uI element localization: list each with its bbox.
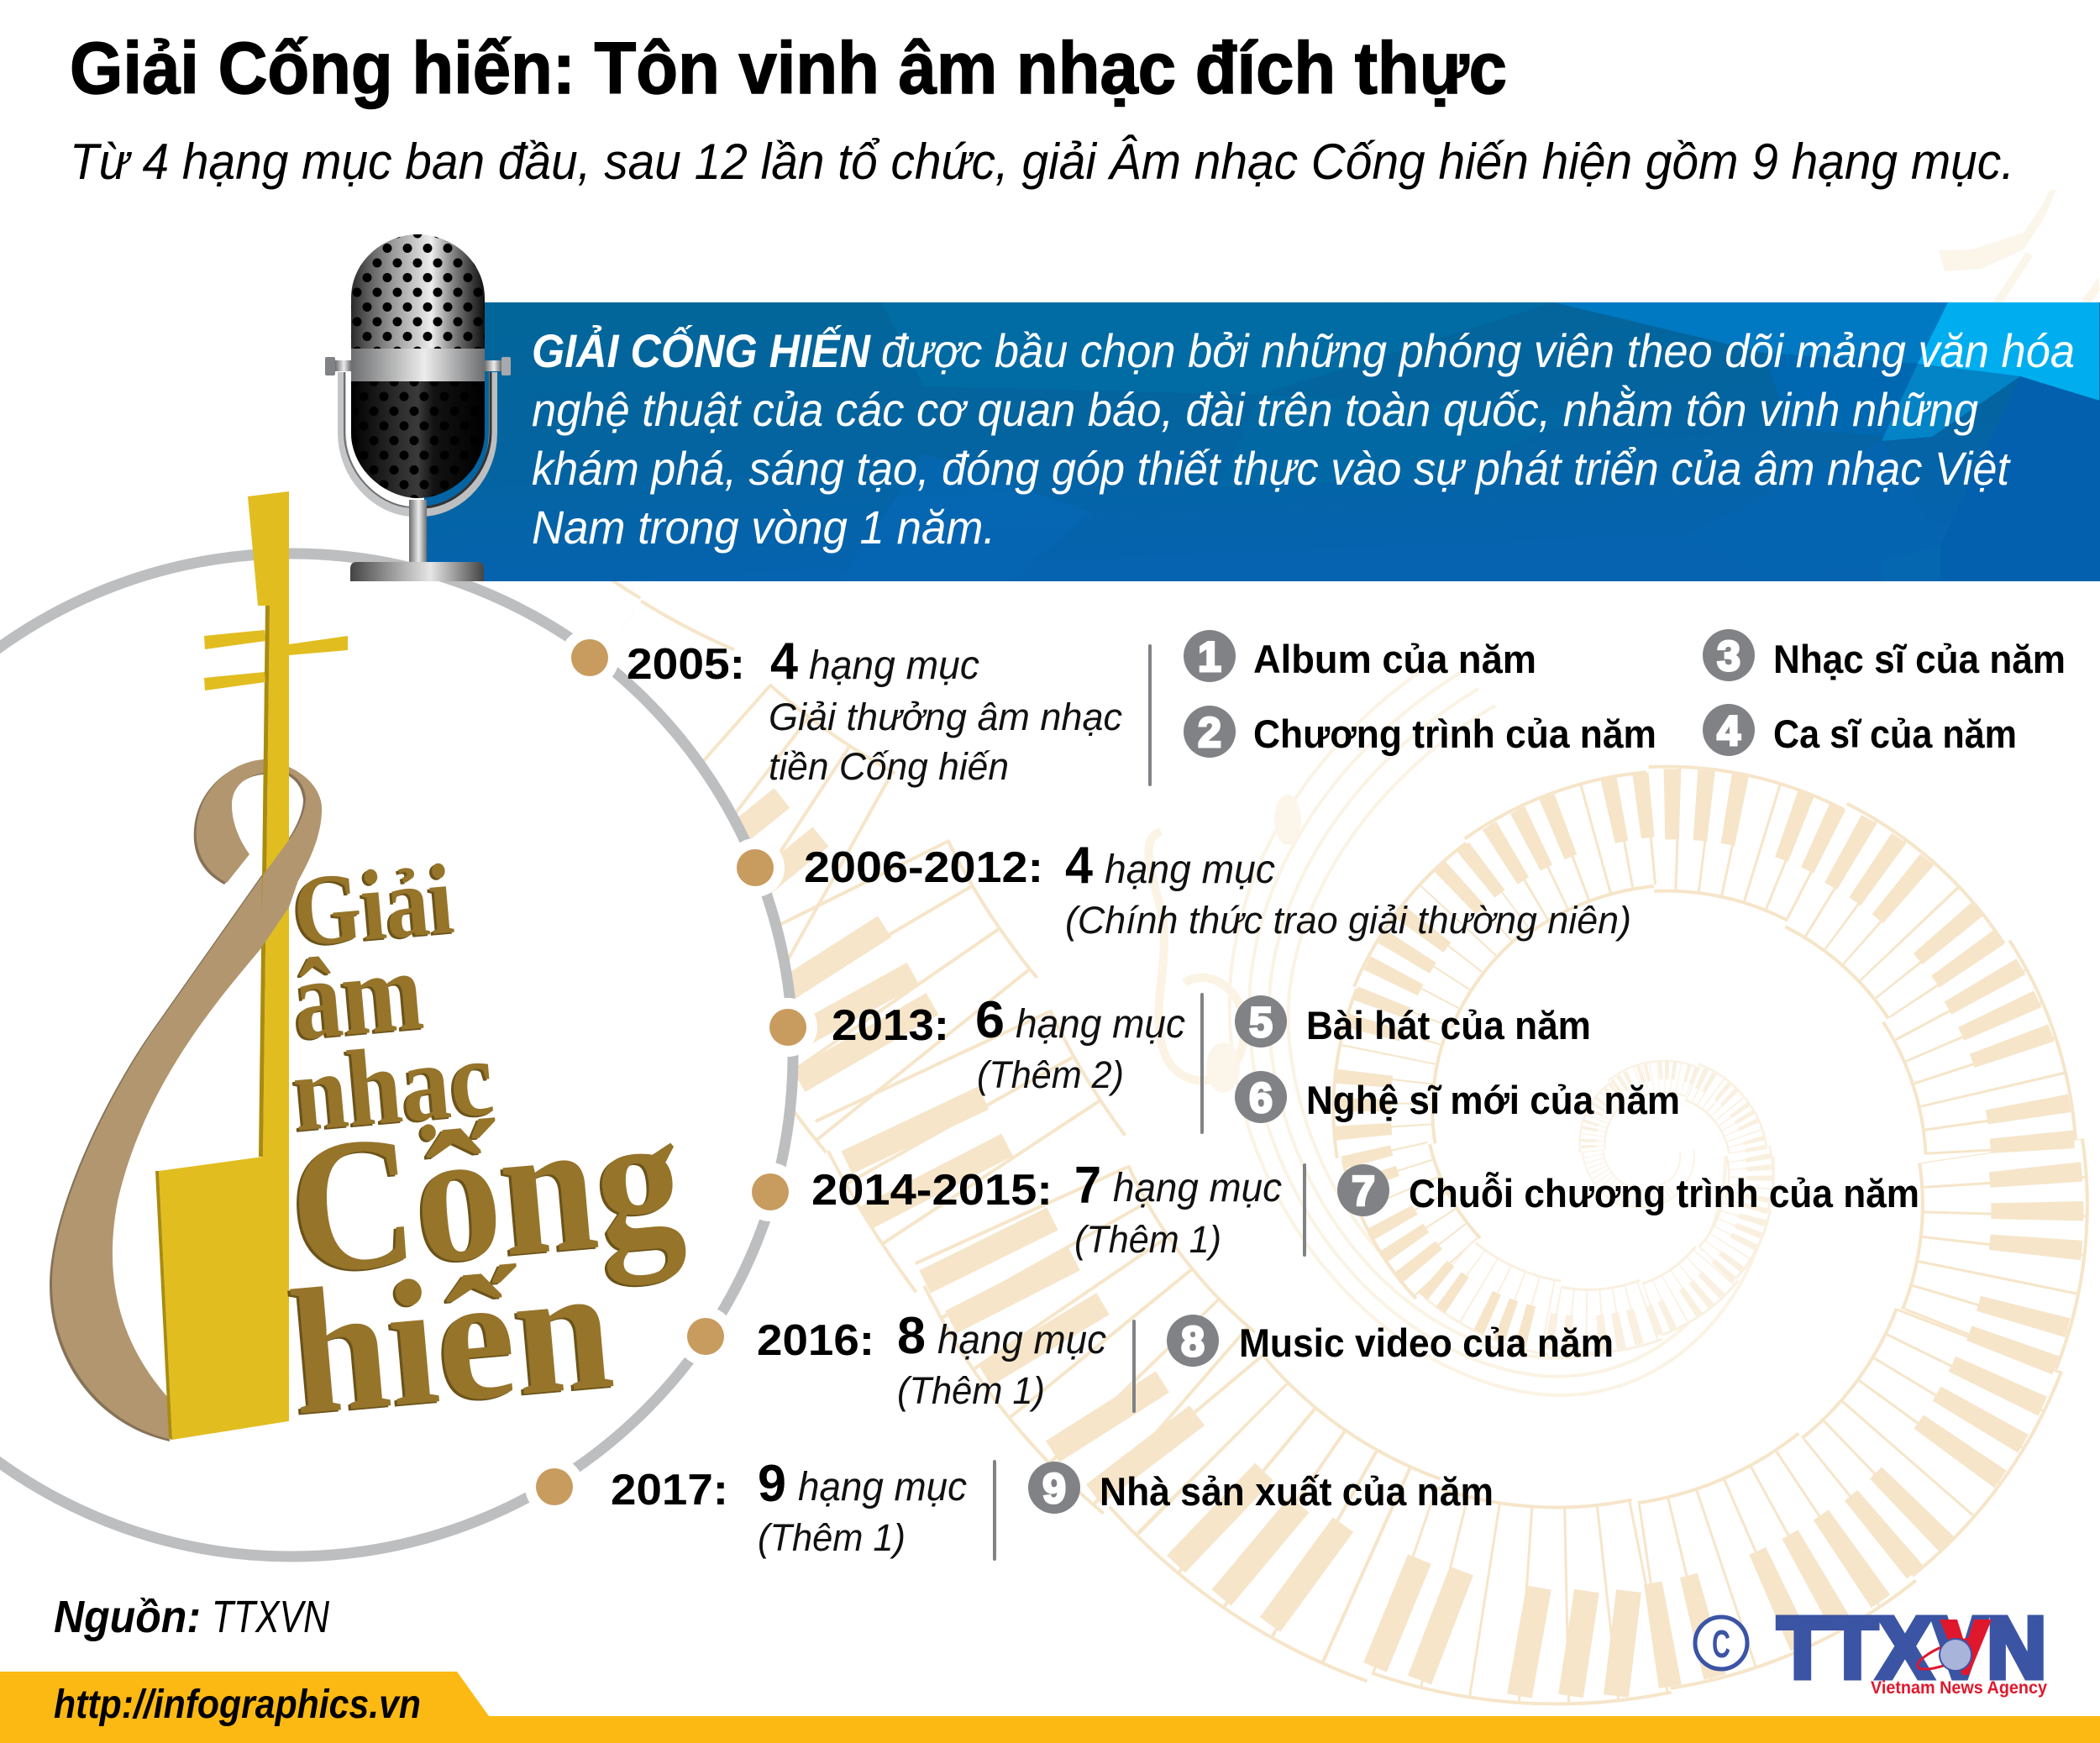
timeline row: 2013: [832, 991, 1204, 1134]
faint music staff swirl and treble clef: [1148, 655, 1773, 1395]
category 7: Chuỗi chương trình của năm: [1409, 1171, 1919, 1215]
category 9: [1028, 1462, 1494, 1514]
logo text: Giải âm nhạc Cống hiến: Cống: [281, 1071, 690, 1315]
categories 1 to 4: Album của năm: [1253, 637, 1536, 681]
timeline row: 2016: 2016:: [757, 1316, 874, 1365]
categories 5 and 6: 5: [1249, 999, 1273, 1046]
timeline row: 2005: 2005:: [627, 640, 745, 689]
categories 1 to 4: [1184, 629, 2066, 758]
logo: TTXVN Vietnam News Agency: C: [1712, 1622, 1730, 1666]
subtitle: Từ 4 hạng mục ban đầu, sau 12 lần tổ chức, giải Âm nhạc Cống hiến hiện gồm 9 hạng mục.: [70, 134, 2014, 190]
logo text: Giải âm nhạc Cống hiến: [281, 843, 690, 1453]
timeline row: 2006-2012: (Chính thức trao giải thường niên): [1065, 899, 1631, 942]
timeline row: 2006-2012: [804, 837, 1631, 942]
source credit: Nguồn:: [54, 1592, 201, 1642]
timeline row: 2005: tiền Cống hiến: [769, 745, 1009, 788]
white disc of the timeline ring: [0, 554, 793, 1557]
timeline row: 2013: 2013:: [832, 1001, 949, 1050]
timeline row: 2006-2012: 2006-2012:: [804, 843, 1043, 892]
category 9: Nhà sản xuất của năm: [1100, 1469, 1494, 1514]
timeline row: 2006-2012: hạng mục: [1105, 848, 1275, 892]
categories 5 and 6: 6: [1249, 1074, 1273, 1121]
timeline row: 2014-2015: [811, 1157, 1306, 1261]
categories 5 and 6: Bài hát của năm: [1306, 1003, 1591, 1047]
icon: dan day instrument logo: [52, 491, 348, 1440]
category 9: 9: [1042, 1465, 1066, 1512]
timeline row: 2005: Giải thưởng âm nhạc: [769, 696, 1122, 738]
categories 5 and 6: Nghệ sĩ mới của năm: [1306, 1078, 1680, 1122]
category 8: Music video của năm: [1239, 1320, 1614, 1365]
categories 1 to 4: 3: [1717, 633, 1740, 680]
banner text: nghệ thuật của các cơ quan báo, đài trên toàn quốc, nhằm tôn vinh những: [532, 383, 1978, 436]
category 8: [1167, 1315, 1614, 1367]
banner text: khám phá, sáng tạo, đóng góp thiết thực vào sự phát triển của âm nhạc Việt: [532, 442, 2011, 495]
source credit: [54, 1592, 330, 1642]
timeline row: 2014-2015: hạng mục: [1113, 1166, 1282, 1210]
source credit: TTXVN: [212, 1592, 330, 1642]
timeline row: 2013: hạng mục: [1016, 1002, 1185, 1047]
timeline row: 2017: [611, 1455, 996, 1561]
timeline row: 2014-2015: 7: [1074, 1157, 1101, 1215]
timeline ring with milestones: [0, 554, 817, 1557]
category 7: 7: [1352, 1168, 1375, 1215]
footer yellow bar with website: http://infographics.vn: [54, 1683, 421, 1727]
timeline row: 2014-2015: 2014-2015:: [811, 1166, 1053, 1215]
timeline row: 2014-2015: (Thêm 1): [1074, 1218, 1221, 1261]
logo: TTXVN Vietnam News Agency: Vietnam News Agency: [1871, 1678, 2047, 1698]
panel: blue intro banner: [424, 302, 2100, 581]
categories 1 to 4: 1: [1198, 633, 1221, 680]
timeline row: 2005: 4: [770, 633, 798, 690]
categories 1 to 4: Ca sĩ của năm: [1773, 711, 2017, 756]
banner text: [532, 324, 2075, 554]
footer yellow bar with website: [0, 1672, 2100, 1743]
banner text: Nam trong vòng 1 năm.: [532, 501, 995, 554]
logo text: Giải âm nhạc Cống hiến: Giải: [289, 843, 458, 968]
categories 1 to 4: Chương trình của năm: [1253, 711, 1656, 756]
timeline row: 2017: (Thêm 1): [758, 1516, 906, 1559]
categories 1 to 4: Nhạc sĩ của năm: [1773, 637, 2066, 681]
icon: microphone: [325, 234, 511, 581]
title: Giải Cống hiến: Tôn vinh âm nhạc đích thực: [70, 28, 1507, 109]
piano keyboard spiral background: [470, 672, 2037, 1696]
categories 1 to 4: 4: [1717, 707, 1740, 754]
timeline row: 2016: 8: [897, 1307, 926, 1365]
timeline row: 2005: [627, 633, 1152, 788]
timeline row: 2017: 9: [758, 1455, 786, 1513]
faint music notes top right: [1932, 190, 2100, 403]
timeline row: 2013: (Thêm 2): [977, 1053, 1124, 1096]
logo: TTXVN Vietnam News Agency: TTXVN: [1777, 1599, 2046, 1696]
timeline row: 2017: 2017:: [611, 1466, 728, 1515]
banner text: GIẢI CỐNG HIẾN: [532, 324, 871, 377]
logo text: Giải âm nhạc Cống hiến: hiến: [282, 1226, 620, 1453]
category 8: 8: [1181, 1318, 1205, 1365]
logo text: Giải âm nhạc Cống hiến: nhạc: [288, 1017, 498, 1155]
timeline row: 2005: hạng mục: [809, 643, 979, 688]
timeline row: 2017: hạng mục: [798, 1465, 967, 1509]
categories 1 to 4: 2: [1198, 709, 1221, 756]
categories 5 and 6: [1235, 995, 1680, 1123]
timeline row: 2006-2012: 4: [1065, 837, 1093, 895]
timeline row: 2016: [757, 1307, 1136, 1413]
timeline row: 2016: hạng mục: [937, 1318, 1106, 1362]
timeline row: 2016: (Thêm 1): [897, 1369, 1045, 1412]
timeline row: 2013: 6: [975, 991, 1005, 1049]
logo text: Giải âm nhạc Cống hiến: âm: [288, 927, 428, 1064]
